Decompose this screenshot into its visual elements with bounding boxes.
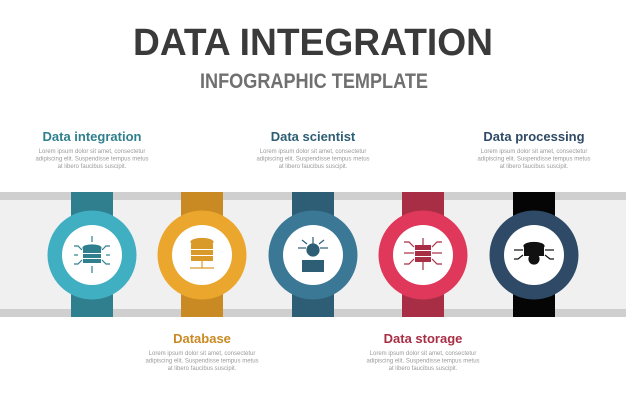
step 4: data storage [378, 192, 468, 317]
label: database: Lorem ipsum dolor sit amet, consectetur [149, 351, 255, 357]
step 3: data scientist [268, 192, 358, 317]
label: data processing: Lorem ipsum dolor sit amet, consectetur [481, 149, 587, 155]
label: data storage: Data storage [384, 331, 462, 346]
label: data scientist: adipiscing elit. Suspendisse tempus metus [256, 156, 370, 162]
label: database: adipiscing elit. Suspendisse tempus metus [145, 358, 259, 364]
label: data integration: Data integration [43, 129, 142, 144]
label: data storage: at libero faucibus suscipit. [389, 366, 458, 372]
label: data processing [477, 129, 591, 170]
label: data integration: at libero faucibus suscipit. [58, 164, 127, 170]
label: data processing: adipiscing elit. Suspendisse tempus metus [477, 156, 591, 162]
label: data scientist [256, 129, 370, 170]
step 1: data integration [48, 192, 136, 317]
label: data storage: Lorem ipsum dolor sit amet, consectetur [370, 351, 476, 357]
icon: storage server [404, 238, 442, 270]
icon: database gear [514, 242, 554, 264]
label: data processing: at libero faucibus suscipit. [500, 164, 569, 170]
icon: scientist [298, 237, 328, 272]
label: data scientist: at libero faucibus suscipit. [279, 164, 348, 170]
label: data integration: adipiscing elit. Suspendisse tempus metus [35, 156, 149, 162]
label: data processing: Data processing [483, 129, 585, 144]
label: database: Database [173, 331, 231, 346]
title: DATA INTEGRATION [133, 22, 493, 64]
label: data integration [35, 129, 149, 170]
step 2: database [158, 192, 246, 317]
subtitle: INFOGRAPHIC TEMPLATE [200, 70, 428, 93]
step 5: data processing [490, 192, 578, 317]
label: data scientist: Lorem ipsum dolor sit amet, consectetur [260, 149, 366, 155]
label: data integration: Lorem ipsum dolor sit amet, consectetur [39, 149, 145, 155]
label: data storage: adipiscing elit. Suspendisse tempus metus [366, 358, 480, 364]
label: database [145, 331, 259, 372]
label: data scientist: Data scientist [271, 129, 356, 144]
band background [0, 192, 626, 317]
icon: database network [74, 236, 110, 273]
label: database: at libero faucibus suscipit. [168, 366, 237, 372]
label: data storage [366, 331, 480, 372]
icon: server database [190, 238, 214, 268]
